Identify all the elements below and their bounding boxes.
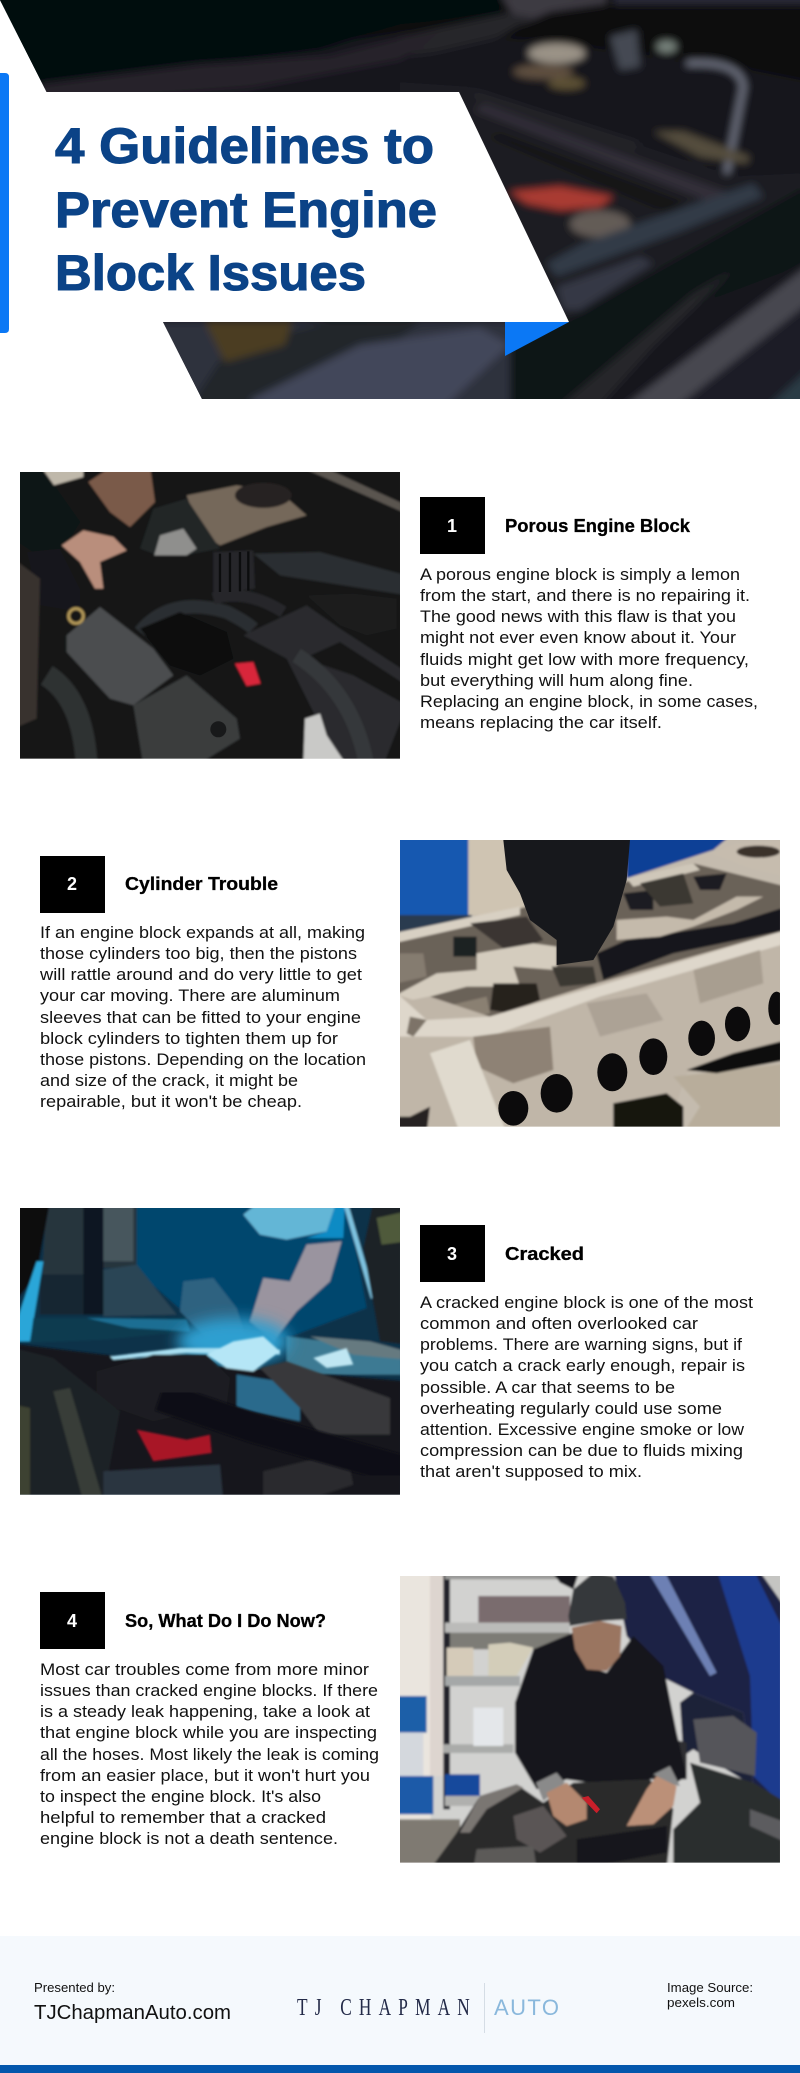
number badge 2 (40, 856, 105, 913)
footer: image source: pexels.com (667, 1995, 735, 2010)
body text: step 2: block cylinders to tighten them up for (40, 1029, 338, 1048)
body text: step 4: engine block is not a death sentence. (40, 1829, 338, 1848)
hero banner photo (0, 0, 800, 420)
panel: step 1 (13, 465, 758, 765)
heading: Cracked: Cracked (505, 1243, 584, 1264)
body text: step 2: and size of the crack, it might be (40, 1071, 298, 1090)
body text: step 3: common and often overlooked car (420, 1314, 698, 1333)
title: Prevent Engine (55, 182, 437, 238)
title: Block Issues (55, 245, 366, 301)
body text: step 3: problems. There are warning signs, but if (420, 1335, 742, 1354)
body text: step 1: fluids might get low with more frequency, (420, 650, 749, 669)
logo: TJ Chapman Auto (297, 1983, 559, 2033)
body text: step 4: is a steady leak happening, take a look at (40, 1702, 370, 1721)
body text: step 1: The good news with this flaw is that you (420, 607, 736, 626)
body text: step 2: repairable, but it won't be cheap. (40, 1092, 302, 1111)
body text: step 1 (420, 565, 758, 732)
body text: step 2: sleeves that can be fitted to your engine (40, 1008, 361, 1027)
photo: hands working on engine (13, 465, 407, 765)
body text: step 2 (39, 923, 366, 1111)
heading: Porous Engine Block: Porous Engine Block (505, 515, 691, 536)
body text: step 1: Replacing an engine block, in some cases, (420, 692, 758, 711)
blue accent triangle (505, 322, 569, 356)
number badge 1: 1 (447, 516, 457, 536)
body text: step 3: possible. A car that seems to be (420, 1378, 675, 1397)
number badge 2: 2 (67, 874, 77, 894)
body text: step 3: A cracked engine block is one of the most (420, 1293, 753, 1312)
footer: presented by: Presented by: (34, 1980, 115, 1995)
panel: step 2 (39, 833, 787, 1133)
heading: Cylinder Trouble: Cylinder Trouble (125, 873, 278, 894)
footer: presented by (34, 1980, 231, 2024)
body text: step 2: will rattle around and do very little to get (39, 965, 362, 984)
body text: step 4: helpful to remember that a cracked (40, 1808, 326, 1827)
logo: TJ Chapman Auto: TJ CHAPMAN (297, 1993, 470, 2021)
title panel (0, 92, 569, 322)
number badge 3: 3 (447, 1244, 457, 1264)
number badge 4 (40, 1592, 105, 1649)
body text: step 2: If an engine block expands at all, making (40, 923, 365, 942)
body text: step 1: from the start, and there is no repairing it. (420, 586, 750, 605)
body text: step 1: but everything will hum along fine. (420, 671, 693, 690)
body text: step 4: issues than cracked engine blocks. If there (40, 1681, 378, 1700)
title (55, 118, 437, 301)
body text: step 3: compression can be due to fluids mixing (420, 1441, 743, 1460)
body text: step 1: means replacing the car itself. (420, 713, 662, 732)
body text: step 4: to inspect the engine block. It's also (40, 1787, 321, 1806)
body text: step 4: all the hoses. Most likely the leak is coming (40, 1745, 379, 1764)
number badge 1 (420, 497, 485, 554)
body text: step 4: that engine block while you are inspecting (40, 1723, 377, 1742)
photo: gloved hand on cylinder head (393, 833, 787, 1133)
panel: step 4 (40, 1569, 787, 1869)
body text: step 4: Most car troubles come from more minor (40, 1660, 369, 1679)
body text: step 2: your car moving. There are aluminum (40, 986, 340, 1005)
body text: step 3: overheating regularly could use some (420, 1399, 722, 1418)
panel: step 3 (13, 1201, 753, 1501)
photo: welding sparks over engine (13, 1201, 407, 1501)
footer: image source: Image Source: (667, 1980, 753, 1995)
blue side bar (0, 73, 9, 333)
body text: step 3: that aren't supposed to mix. (420, 1462, 642, 1481)
body text: step 3: attention. Excessive engine smoke or low (420, 1420, 745, 1439)
footer: presented by: TJChapmanAuto.com (34, 2002, 231, 2024)
body text: step 3: you catch a crack early enough, repair is (420, 1356, 745, 1375)
body text: step 1: might not ever even know about it. Your (420, 628, 736, 647)
body text: step 2: those pistons. Depending on the location (40, 1050, 366, 1069)
body text: step 4 (40, 1660, 379, 1848)
number badge 3 (420, 1225, 485, 1282)
footer: image source (667, 1980, 753, 2010)
body text: step 3 (420, 1293, 753, 1481)
heading: So, What Do I Do Now?: So, What Do I Do Now? (125, 1610, 326, 1631)
photo: mechanic leaning over engine (393, 1569, 787, 1869)
body text: step 4: from an easier place, but it won't hurt you (40, 1766, 370, 1785)
body text: step 2: those cylinders too big, then the pistons (40, 944, 357, 963)
number badge 4: 4 (67, 1611, 77, 1631)
logo: TJ Chapman Auto: AUTO (494, 1995, 559, 2020)
body text: step 1: A porous engine block is simply a lemon (420, 565, 740, 584)
footer blue bar (0, 2065, 800, 2073)
panel: footer (0, 1936, 800, 2065)
title: 4 Guidelines to (55, 118, 434, 174)
